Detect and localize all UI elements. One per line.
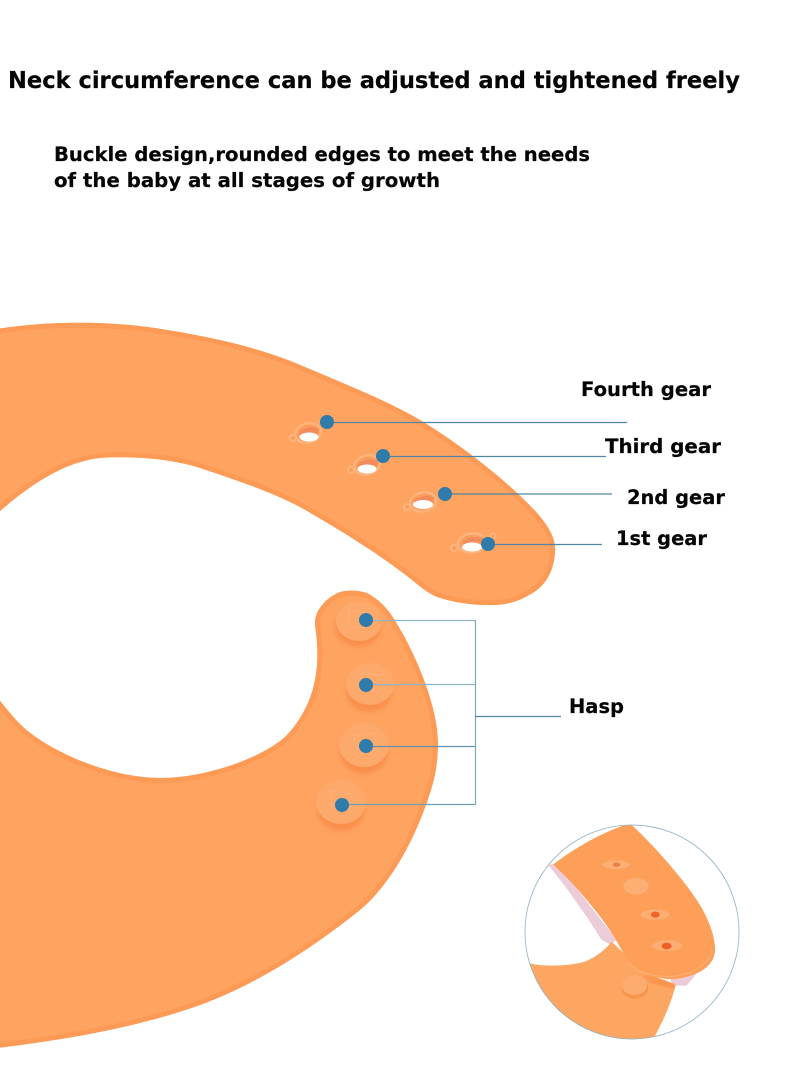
bottom button: [622, 984, 648, 999]
pink underside: [548, 863, 617, 944]
hasp button 2: [346, 663, 394, 712]
inset circle: fastened bib detail: [525, 823, 739, 1042]
gear leader lines and dots: [320, 415, 627, 551]
upper strap: [553, 823, 715, 979]
strap holes: [603, 860, 629, 869]
label: 2nd gear: 2nd gear: [627, 486, 725, 509]
third gear hole: [348, 452, 382, 478]
first gear hole: [451, 532, 496, 554]
label: 1st gear: 1st gear: [616, 527, 707, 550]
hasp button 1: [335, 601, 382, 647]
hasp bracket and dots: [335, 613, 561, 812]
lower bib with hasp buttons: [0, 591, 438, 1050]
second gear hole: [404, 490, 438, 514]
fourth gear hole: [290, 420, 323, 446]
subtitle text block: Buckle design,rounded edges to meet the needs: [54, 143, 590, 166]
subtitle text block: [54, 143, 590, 192]
label: Hasp: Hasp: [569, 695, 624, 718]
subtitle text block: of the baby at all stages of growth: [54, 169, 440, 192]
upper bib strap with gear holes: [0, 323, 555, 605]
label: Third gear: Third gear: [605, 435, 721, 458]
title: Neck circumference can be adjusted and tightened freely: [8, 68, 740, 94]
hasp button 3: [339, 723, 389, 774]
lower bib piece: [530, 942, 676, 1042]
label: Fourth gear: Fourth gear: [581, 378, 711, 401]
hasp button 4: [316, 780, 366, 831]
